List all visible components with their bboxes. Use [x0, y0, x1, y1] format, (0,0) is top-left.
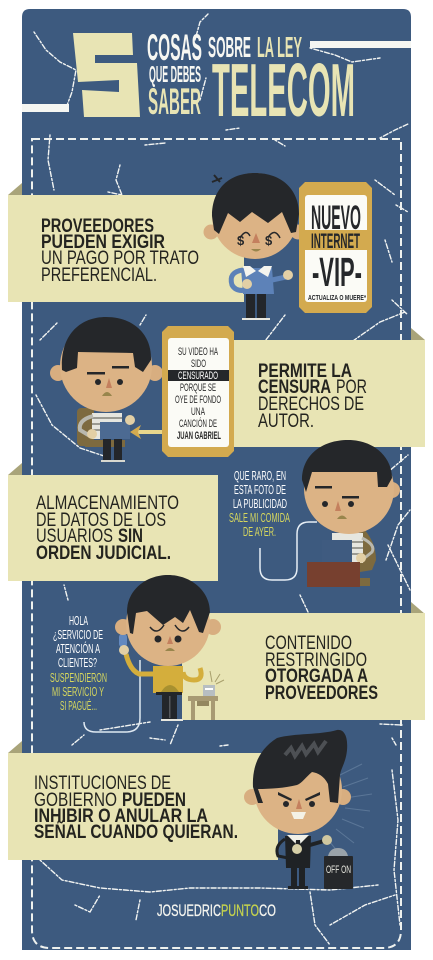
title: SABER [148, 81, 201, 122]
character 4 speech text: CLIENTES? [58, 655, 97, 670]
ticket: censorship notice: PORQUE SE [180, 382, 216, 394]
ticket: censorship notice: SU VIDEO HA [178, 346, 218, 358]
character 3 speech text: QUE RARO, EN [234, 468, 286, 483]
off on switch box [324, 848, 353, 889]
character 4: phone caller [115, 575, 221, 721]
ticket: censorship notice [162, 326, 234, 457]
character 2: censored user [50, 317, 163, 462]
banner 3 text: SIN [118, 526, 143, 547]
off on switch box: OFF ON [326, 864, 351, 876]
banner 1 text: PREFERENCIAL. [41, 265, 157, 286]
ticket: censorship notice: CANCIÓN DE [179, 417, 217, 430]
banner 1 [8, 183, 244, 302]
title [73, 27, 355, 132]
character 3 speech text: LA PUBLICIDAD [233, 496, 287, 511]
banner 5 text: INSTITUCIONES DE [34, 773, 171, 794]
white bar top right [310, 41, 411, 48]
character 4 speech text: ATENCIÓN A [56, 641, 100, 656]
character 1: dollar eyes: $ [237, 233, 245, 248]
banner 1 text: PROVEEDORES [41, 216, 154, 237]
ticket: nuevo internet vip: INTERNET [311, 230, 360, 253]
character 4 speech text: SUSPENDIERON [50, 670, 107, 685]
character 4 speech text: HOLA [69, 613, 88, 628]
banner 4 text: CONTENIDO [265, 633, 352, 654]
footer credit: JOSUEDRIC [157, 901, 221, 920]
banner 2 text: DERECHOS DE [258, 394, 364, 415]
banner 4 text: PROVEEDORES [265, 683, 378, 704]
banner 1 text: PUEDEN EXIGIR [41, 232, 165, 253]
character 1: dollar eyes: $ [265, 233, 273, 248]
banner 5 text: GOBIERNO [34, 790, 117, 811]
banner 3 text: ORDEN JUDICIAL. [36, 543, 171, 564]
character 3 speech text: SALE MI COMIDA [229, 510, 290, 525]
title: COSAS [147, 27, 202, 68]
character 3: laptop user [302, 440, 400, 587]
footer credit: CO [259, 901, 276, 920]
banner 5 text [34, 773, 238, 843]
character 4 speech text: ¿SERVICIO DE [53, 627, 103, 642]
ticket: nuevo internet vip [299, 182, 372, 313]
banner 5 text: INHIBIR O ANULAR LA [34, 806, 208, 827]
character 3 speech text [229, 468, 290, 539]
character 4 speech text: MI SERVICIO Y [52, 684, 104, 699]
character 3 speech text: DE AYER. [243, 524, 276, 539]
banner 1 text: UN PAGO POR TRATO [41, 248, 199, 269]
character 5 light rays [325, 764, 372, 852]
ticket: censorship notice: OYE DE FONDO [175, 394, 221, 406]
ticket: nuevo internet vip: NUEVO [311, 199, 361, 237]
banner 2 text [258, 361, 367, 432]
banner 3 text: USUARIOS [36, 526, 113, 547]
banner 2 text: CENSURA [258, 377, 331, 398]
arrow from notice to character [130, 425, 163, 439]
ticket: nuevo internet vip: -VIP- [312, 249, 362, 295]
banner 2 text: PERMITE LA [258, 361, 352, 382]
banner 4 text [265, 633, 378, 704]
ticket: censorship notice: JUAN GABRIEL [177, 430, 221, 442]
title: LA LEY [257, 32, 302, 64]
ticket: nuevo internet vip: ACTUALIZA O MUERE* [308, 295, 366, 302]
banner 5 [8, 741, 278, 860]
title: SOBRE [208, 32, 251, 64]
dashed content border [32, 139, 401, 948]
banner 4 [182, 602, 425, 720]
banner 2 text: POR [336, 377, 367, 398]
banner 3 text: ALMACENAMIENTO [36, 493, 179, 514]
character 4 phone cord [84, 660, 140, 732]
side table with telephone [188, 671, 224, 720]
character 1: dollar eyes [204, 173, 306, 320]
banner 3 text: DE DATOS DE LOS [36, 510, 166, 531]
banner 4 text: RESTRINGIDO [265, 650, 367, 671]
ticket: censorship notice: CENSURADO [178, 370, 218, 382]
banner 5 text: SEÑAL CUANDO QUIERAN. [34, 821, 238, 843]
big number 5 [73, 33, 140, 117]
banner 2 text: AUTOR. [258, 411, 314, 432]
banner 5 text: PUEDEN [122, 790, 186, 811]
ticket: censorship notice: UNA [191, 406, 205, 418]
character 3 cable [260, 522, 317, 580]
banner 1 text [41, 216, 199, 286]
character 3 speech text: ESTA FOTO DE [234, 482, 286, 497]
banner 3 text [36, 493, 179, 564]
character 4 speech text: SI PAGUÉ... [60, 698, 97, 713]
banner 3 [8, 463, 218, 581]
title: QUE DEBES [149, 61, 201, 87]
ticket: censorship notice: SIDO [191, 358, 206, 370]
footer credit: PUNTO [221, 901, 259, 920]
white bar left [22, 104, 69, 112]
banner 4 text: OTORGADA A [265, 666, 368, 687]
character 5: government official [244, 730, 351, 889]
character 4 speech text [50, 613, 107, 713]
banner 2 [234, 328, 425, 447]
